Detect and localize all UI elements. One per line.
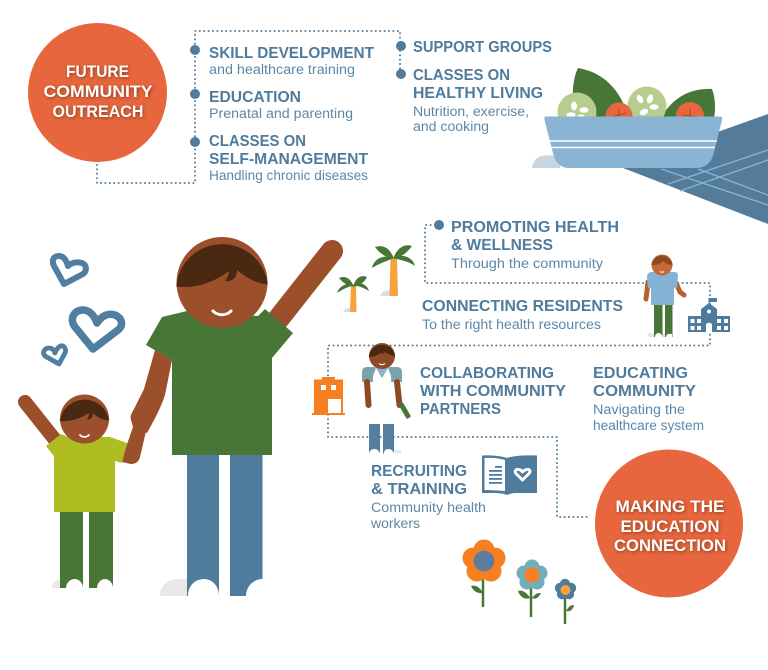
small palm tree: [337, 276, 369, 312]
text block: collaborating with community partners: WITH COMMUNITY: [420, 383, 566, 400]
raised arm: [25, 402, 56, 441]
text block: classes on healthy living: CLASSES ON: [413, 67, 510, 84]
smile: [80, 435, 89, 437]
smile: [660, 270, 664, 273]
circle: future community outreach: COMMUNITY: [44, 82, 153, 101]
child figure: [25, 394, 147, 588]
shirt: [146, 309, 293, 455]
text block: promoting health and wellness: [451, 219, 619, 271]
dotted connector: education connection: [328, 225, 710, 517]
text block: education: EDUCATION: [209, 89, 301, 106]
text block: education: Prenatal and parenting: [209, 106, 353, 121]
dotted connector: future outreach: [97, 31, 400, 183]
text block: classes on healthy living: HEALTHY LIVING: [413, 85, 543, 102]
feet: [188, 579, 262, 596]
circle: future community outreach: FUTURE: [66, 62, 129, 81]
leaves: [573, 68, 715, 118]
text block: skill development: and healthcare training: [209, 62, 355, 77]
shirt: [647, 272, 678, 305]
text block: education: [209, 89, 353, 121]
circle: future community outreach: [28, 23, 167, 162]
text block: educating community: healthcare system: [593, 418, 704, 433]
text block: promoting health and wellness: Through the community: [451, 256, 603, 271]
circle: future community outreach: OUTREACH: [52, 102, 144, 121]
arms: [646, 282, 684, 299]
shadow: [52, 579, 66, 588]
hair: [60, 400, 109, 421]
hair: [176, 244, 268, 287]
text block: connecting residents: [422, 298, 623, 332]
tomato slices: [606, 102, 704, 130]
forearm holding hand: [122, 427, 147, 464]
bowl body: [544, 116, 722, 168]
text block: skill development: [209, 45, 374, 77]
icon: open book with heart: [482, 455, 537, 495]
feet: [369, 449, 394, 454]
palm trees: [337, 245, 415, 312]
text block: classes on self-management: CLASSES ON: [209, 133, 306, 150]
green comb: [398, 402, 411, 419]
arms: [367, 382, 400, 405]
feet: [655, 333, 672, 337]
text block: classes on healthy living: [413, 67, 543, 134]
text block: classes on self-management: SELF-MANAGEMENT: [209, 151, 368, 168]
text block: collaborating with community partners: [420, 365, 566, 418]
person in blue shirt: [646, 254, 684, 337]
lowered arm: [131, 350, 172, 433]
icon: school: [688, 298, 730, 332]
cucumber slices: [558, 86, 666, 132]
text block: collaborating with community partners: COLLABORATING: [420, 365, 554, 382]
hair: [369, 345, 395, 357]
teal flower: [516, 560, 548, 617]
large orange flower: [462, 540, 506, 607]
collar: [374, 367, 391, 376]
text block: collaborating with community partners: PARTNERS: [420, 401, 501, 418]
large palm tree: [372, 245, 415, 296]
text block: promoting health and wellness: & WELLNESS: [451, 237, 553, 254]
text block: classes on self-management: Handling chronic diseases: [209, 168, 368, 183]
smile: [379, 364, 385, 365]
text block: educating community: Navigating the: [593, 402, 685, 417]
trousers: [60, 512, 113, 588]
text block: recruiting and training: Community health: [371, 500, 486, 515]
apron: [372, 368, 392, 424]
shirt: [46, 434, 127, 512]
text block: classes on healthy living: Nutrition, exercise,: [413, 104, 529, 119]
large heart: [72, 310, 122, 349]
head: [652, 254, 672, 276]
text block: recruiting and training: RECRUITING: [371, 463, 467, 480]
text block: promoting health and wellness: PROMOTING HEALTH: [451, 219, 619, 236]
icon: orange building: [312, 377, 345, 415]
feet: [66, 579, 113, 588]
raised arm: [276, 251, 332, 322]
trousers: [654, 304, 672, 337]
smile: [213, 311, 231, 315]
connector bullets: future outreach: [190, 41, 406, 147]
text block: connecting residents: To the right health resources: [422, 317, 601, 332]
circle: making the education connection: MAKING THE: [616, 497, 724, 516]
shadow: [160, 579, 190, 596]
circle: making the education connection: [595, 450, 743, 598]
table with lines: [623, 114, 768, 224]
circle: making the education connection: EDUCATION: [620, 517, 720, 536]
bowl shadow: [532, 156, 560, 168]
text block: educating community: COMMUNITY: [593, 383, 696, 400]
small heart: [44, 346, 66, 364]
text block: classes on healthy living: and cooking: [413, 119, 489, 134]
trousers: [369, 424, 394, 454]
head: [369, 343, 395, 369]
text block: educating community: [593, 365, 704, 433]
shadow: [648, 333, 672, 337]
text block: recruiting and training: & TRAINING: [371, 481, 467, 498]
connector bullet: promoting health: [434, 220, 444, 230]
medium heart: [53, 256, 86, 284]
text block: skill development: SKILL DEVELOPMENT: [209, 45, 374, 62]
person with apron: [362, 343, 411, 454]
text block: recruiting and training: workers: [370, 516, 420, 531]
head: [60, 394, 109, 444]
trousers: [187, 455, 262, 596]
hearts: [44, 256, 122, 364]
flowers: [462, 540, 576, 624]
shadow: [395, 450, 401, 453]
text block: recruiting and training: [370, 463, 486, 531]
head: [176, 237, 268, 328]
small blue flower: [555, 579, 576, 624]
salad bowl: [532, 68, 722, 168]
text block: support groups: SUPPORT GROUPS: [413, 39, 552, 56]
text block: connecting residents: CONNECTING RESIDENTS: [422, 298, 623, 315]
adult figure: [131, 237, 332, 596]
text block: educating community: EDUCATING: [593, 365, 688, 382]
circle: making the education connection: CONNECTION: [614, 536, 726, 555]
hair: [651, 256, 673, 265]
shirt sleeves: [362, 367, 402, 382]
text block: classes on self-management: [209, 133, 368, 183]
bowl stripes: [550, 141, 717, 148]
